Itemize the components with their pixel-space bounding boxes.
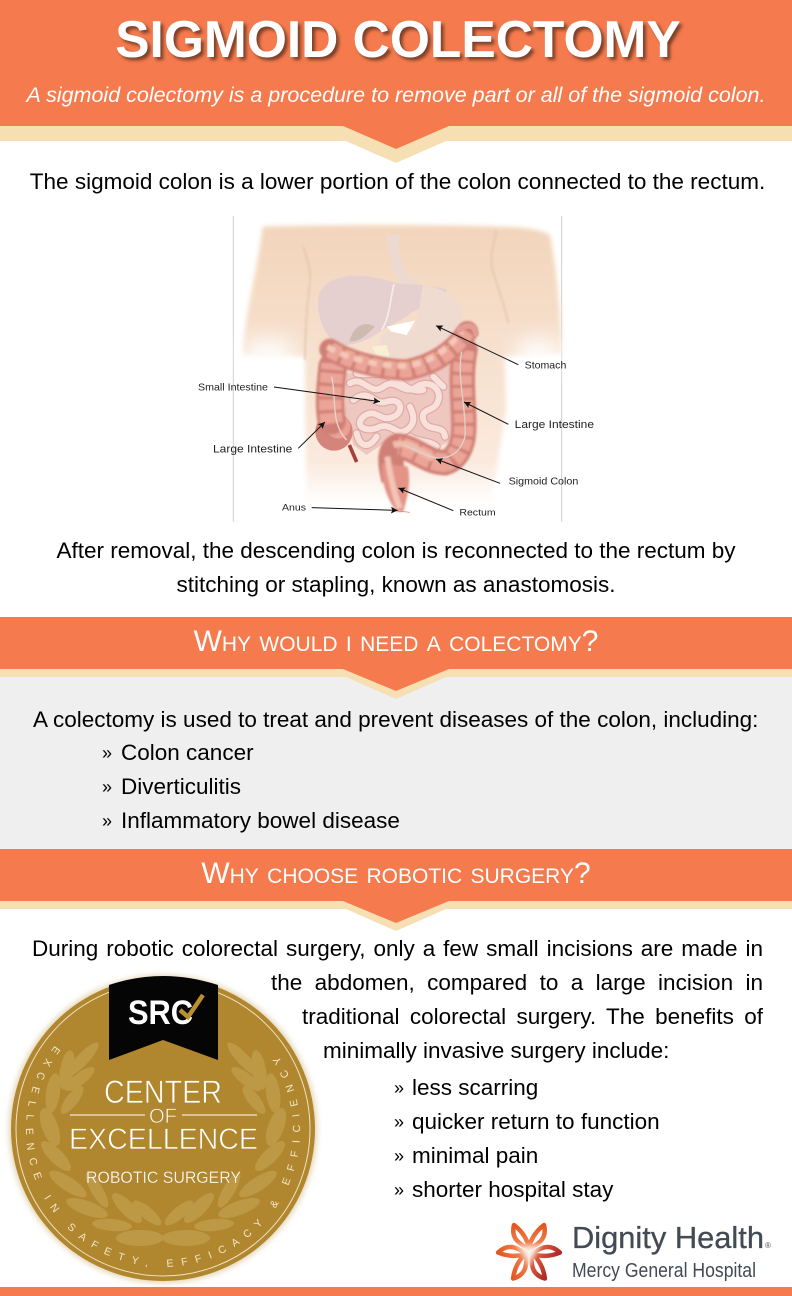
badge text: ROBOTIC SURGERY xyxy=(86,1168,241,1187)
disease list: » xyxy=(102,811,112,831)
benefits list: » xyxy=(394,1112,404,1132)
benefits list: minimal pain xyxy=(412,1143,538,1168)
ascending colon xyxy=(330,367,333,420)
benefits list: shorter hospital stay xyxy=(412,1177,613,1202)
sigmoid xyxy=(391,446,447,480)
organ labels: Sigmoid Colon xyxy=(509,476,578,487)
small intestine xyxy=(345,365,452,455)
curved motto: EXCELLENCE IN SAFETY, EFFICACY & EFFICIENCY xyxy=(26,1046,300,1268)
badge text xyxy=(69,1074,258,1187)
colectomy text: A colectomy is used to treat and prevent diseases of the colon, including: xyxy=(33,707,758,732)
subtitle: A sigmoid colectomy is a procedure to remove part or all of the sigmoid colon. xyxy=(27,83,765,107)
logo wordmark: ® xyxy=(765,1241,771,1250)
organ labels: Large Intestine xyxy=(515,419,594,431)
intro text: The sigmoid colon is a lower portion of the colon connected to the rectum. xyxy=(30,169,765,194)
icon: star mark xyxy=(498,1225,560,1279)
organ labels: Small Intestine xyxy=(198,383,268,394)
disease list: Colon cancer xyxy=(121,740,254,765)
benefits list: quicker return to function xyxy=(412,1109,660,1134)
torso skin xyxy=(240,225,563,502)
benefits list xyxy=(394,1075,660,1202)
robotic surgery paragraph: minimally invasive surgery include: xyxy=(323,1038,669,1063)
benefits list: » xyxy=(394,1180,404,1200)
robotic surgery paragraph: the abdomen, compared to a large incision in xyxy=(271,970,763,995)
reconnection text: stitching or stapling, known as anastomosis. xyxy=(176,572,615,597)
black ribbon xyxy=(109,976,218,1060)
badge text: OF xyxy=(149,1105,177,1128)
badge text: CENTER xyxy=(104,1074,222,1110)
title: SIGMOID COLECTOMY xyxy=(115,10,681,68)
organ labels: Anus xyxy=(282,503,306,513)
benefits list: » xyxy=(394,1146,404,1166)
organ labels: Large Intestine xyxy=(213,443,292,455)
esophagus, liver and stomach xyxy=(318,235,462,358)
robotic surgery paragraph: traditional colorectal surgery. The benefits of xyxy=(302,1004,763,1029)
reconnection text xyxy=(56,538,736,597)
large intestine and sigmoid colon xyxy=(315,326,476,512)
logo wordmark: Mercy General Hospital xyxy=(572,1260,756,1282)
SRC logo: SRC xyxy=(128,994,193,1032)
badge text: EXCELLENCE xyxy=(69,1123,258,1156)
benefits list: » xyxy=(394,1078,404,1098)
organ labels: Stomach xyxy=(525,361,566,372)
rectum xyxy=(382,463,409,512)
heading: why colectomy: Why would i need a colectomy? xyxy=(194,625,598,658)
benefits list: less scarring xyxy=(412,1075,538,1100)
disease list xyxy=(102,740,400,833)
frame lines xyxy=(233,216,562,522)
descending colon xyxy=(445,350,465,463)
disease list: Diverticulitis xyxy=(121,774,241,799)
heading: why robotic: Why choose robotic surgery? xyxy=(201,857,591,890)
laurel wreath xyxy=(36,1039,290,1246)
reconnection text: After removal, the descending colon is reconnected to the rectum by xyxy=(56,538,736,563)
logo wordmark: Dignity Health xyxy=(572,1220,764,1255)
organ labels xyxy=(198,361,594,517)
robotic surgery paragraph: During robotic colorectal surgery, only a few small incisions are made in xyxy=(32,936,763,961)
disease list: » xyxy=(102,743,112,763)
transverse colon xyxy=(330,332,467,370)
organ labels: Rectum xyxy=(459,507,496,517)
disease list: » xyxy=(102,777,112,797)
logo wordmark xyxy=(572,1220,771,1282)
robotic surgery paragraph xyxy=(32,936,764,1063)
disease list: Inflammatory bowel disease xyxy=(121,808,400,833)
organ arrows xyxy=(274,326,518,511)
